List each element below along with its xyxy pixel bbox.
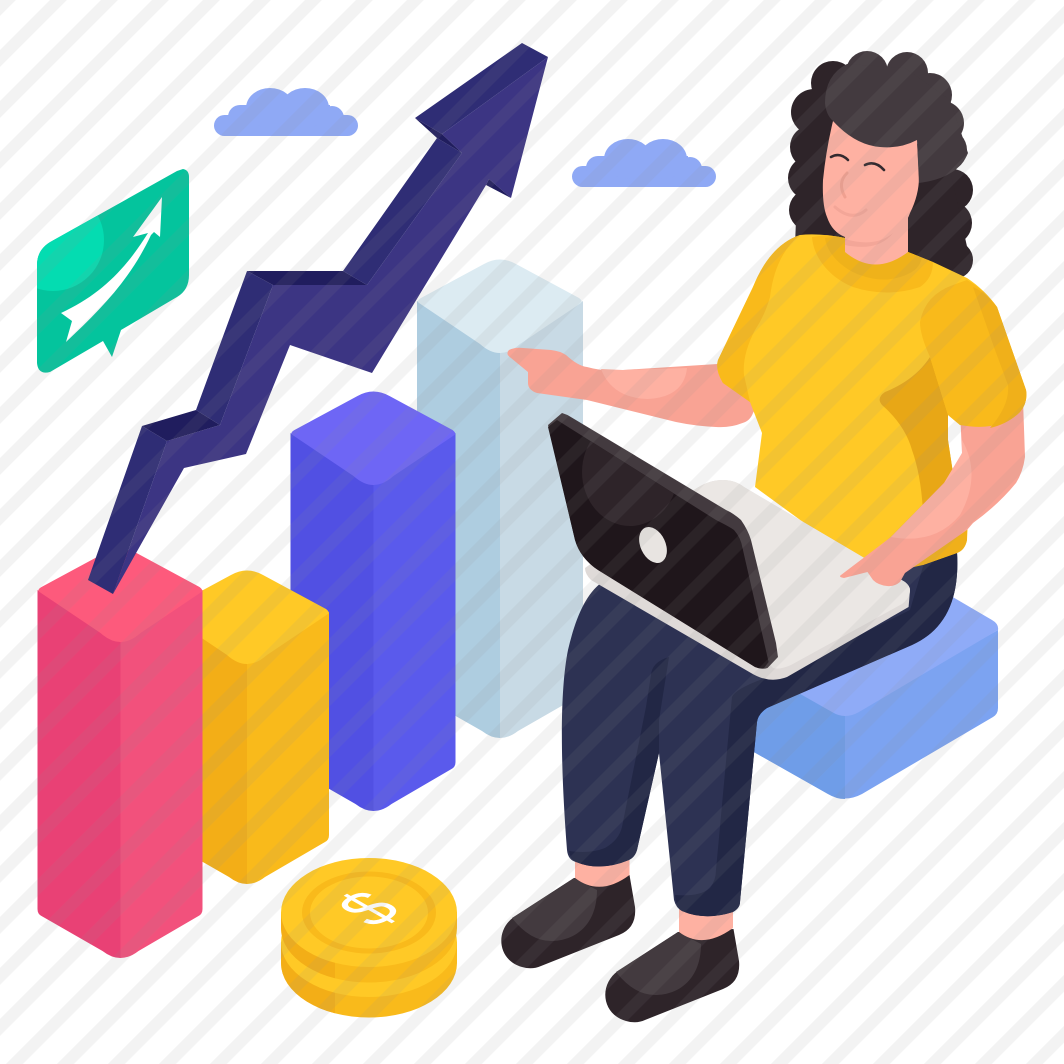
- smile: [835, 207, 866, 215]
- bar: purple: [290, 392, 456, 811]
- dollar sign: $: [320, 881, 417, 936]
- growth arrow: [88, 43, 548, 594]
- icon: green growth badge: [37, 169, 189, 373]
- left shoe: [501, 875, 635, 968]
- laptop logo: [634, 522, 672, 568]
- cloud left: [214, 88, 358, 136]
- bar: light blue: [417, 260, 583, 738]
- laptop lid: [548, 413, 778, 669]
- hair front: [825, 51, 968, 183]
- person: [501, 51, 1026, 1022]
- laptop screen: [548, 420, 769, 668]
- ankles: [575, 850, 733, 940]
- trousers: [562, 540, 957, 916]
- blue seat box: [740, 596, 998, 799]
- laptop: [548, 413, 910, 680]
- yellow shirt: [717, 230, 1026, 570]
- right sleeve: [920, 280, 1026, 428]
- bar: yellow: [164, 570, 329, 884]
- cloud right: [572, 139, 716, 187]
- eyes: [831, 155, 884, 170]
- neck and face: [823, 121, 919, 264]
- coin stack: [281, 858, 457, 1017]
- bar: red: [38, 548, 202, 958]
- laptop base: [585, 480, 910, 680]
- right shoe: [605, 929, 739, 1022]
- right arm and hand: [840, 400, 1025, 586]
- nose: [841, 173, 847, 197]
- pointing arm: [507, 348, 760, 427]
- hair back: [788, 61, 973, 285]
